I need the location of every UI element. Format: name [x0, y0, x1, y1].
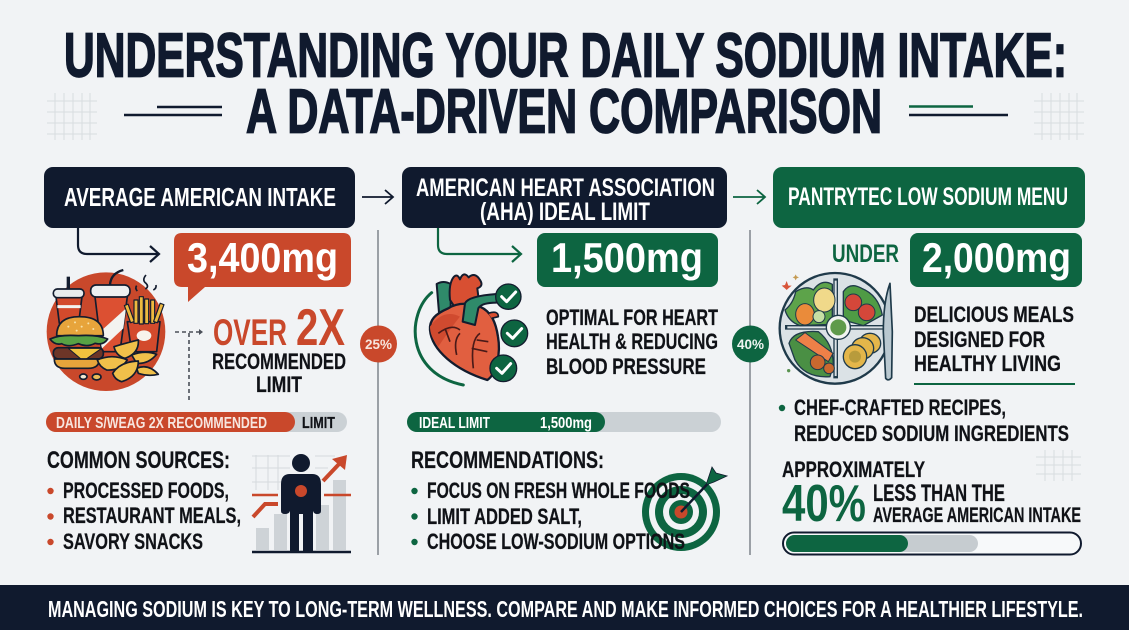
header: PantryTec low sodium menu [773, 167, 1085, 228]
divider with 40% badge [732, 230, 769, 555]
list: common sources: RESTAURANT MEALS, [63, 503, 241, 528]
header: American Heart Association [402, 167, 727, 228]
list: common sources: SAVORY SNACKS [63, 529, 203, 554]
stat: over 2X recommended limit: OVER [213, 312, 287, 353]
icon: target with arrow [642, 473, 720, 551]
heading: recommendations: RECOMMENDATIONS: [411, 447, 604, 474]
list: chef-crafted recipes [779, 395, 1069, 446]
text: optimal for heart health: HEALTH & REDUCING [546, 329, 718, 354]
text: optimal for heart health: OPTIMAL FOR HEART [546, 305, 718, 330]
text: delicious meals [914, 302, 1075, 384]
header: American Heart Association: (AHA) IDEAL LIMIT [480, 198, 650, 226]
badge: 2,000mg: 2,000mg [922, 234, 1071, 281]
header: average American intake: AVERAGE AMERICAN INTAKE [64, 184, 336, 212]
arrow: second to third column [733, 190, 765, 204]
progress bar: ideal limit [407, 412, 721, 432]
panel: average American intake [44, 167, 355, 554]
stat: over 2X recommended limit: 2X [296, 299, 345, 357]
stat: over 2X recommended limit: LIMIT [256, 372, 302, 397]
panel: AHA ideal limit [402, 167, 727, 554]
text: delicious meals: HEALTHY LIVING [914, 351, 1061, 376]
callout: 3,400mg: 3,400mg [187, 234, 338, 281]
badge: 1,500mg: 1,500mg [551, 234, 703, 281]
icon: healthy plate [780, 273, 892, 384]
icon: person with rising chart [252, 454, 351, 552]
divider with 25% badge [360, 230, 397, 555]
label: under: UNDER [832, 240, 899, 268]
stat: approximately 40% less: 40% [782, 475, 866, 533]
divider with 40% badge: 40% [737, 336, 765, 352]
icon: heart with checks [415, 274, 528, 385]
connector: dashed link to progress bar [175, 329, 203, 403]
list: chef-crafted recipes: CHEF-CRAFTED RECIPES, [794, 395, 1006, 420]
stat: approximately 40% less [782, 457, 1081, 533]
divider with 25% badge: 25% [365, 336, 393, 352]
stat: approximately 40% less: LESS THAN THE [873, 480, 1005, 507]
footer banner [0, 585, 1129, 630]
icon: arrow in target [681, 467, 727, 512]
arrow: elbow to 1,500mg [438, 228, 521, 262]
progress bar: daily average: LIMIT [302, 415, 335, 432]
list: recommendations: CHOOSE LOW-SODIUM OPTIONS [427, 529, 685, 554]
arrow: elbow to 3,400mg [78, 228, 159, 262]
icon: fast food [47, 270, 165, 391]
header: American Heart Association: AMERICAN HEART ASSOCIATION [416, 174, 715, 202]
progress bar: ideal limit: IDEAL LIMIT [419, 415, 490, 432]
text: delicious meals: DESIGNED FOR [914, 327, 1045, 352]
stat: approximately 40% less: APPROXIMATELY [782, 457, 925, 482]
list: common sources [47, 478, 241, 554]
progress bar: ideal limit: 1,500mg [540, 415, 592, 432]
stat: over 2X recommended limit: RECOMMENDED [212, 349, 346, 374]
list: recommendations [411, 478, 690, 554]
text: optimal for heart health [546, 305, 718, 379]
stat: over 2X recommended limit [212, 299, 346, 397]
list: common sources: PROCESSED FOODS, [63, 478, 229, 503]
panel: PantryTec low sodium menu [773, 167, 1085, 554]
text: delicious meals: DELICIOUS MEALS [914, 302, 1074, 327]
progress bar: 40% less [783, 532, 1081, 554]
list: recommendations: FOCUS ON FRESH WHOLE FOODS [427, 478, 690, 503]
list: recommendations: LIMIT ADDED SALT, [427, 504, 582, 529]
callout: 3,400mg [174, 233, 351, 302]
text: optimal for heart health: BLOOD PRESSURE [546, 354, 706, 379]
header: average American intake [44, 167, 355, 228]
heading: common sources: COMMON SOURCES: [47, 447, 230, 474]
title [64, 22, 1067, 146]
arrow: first to second column [362, 190, 393, 204]
progress bar: daily average: DAILY S/WEAG 2X RECOMMENDED [56, 415, 267, 432]
